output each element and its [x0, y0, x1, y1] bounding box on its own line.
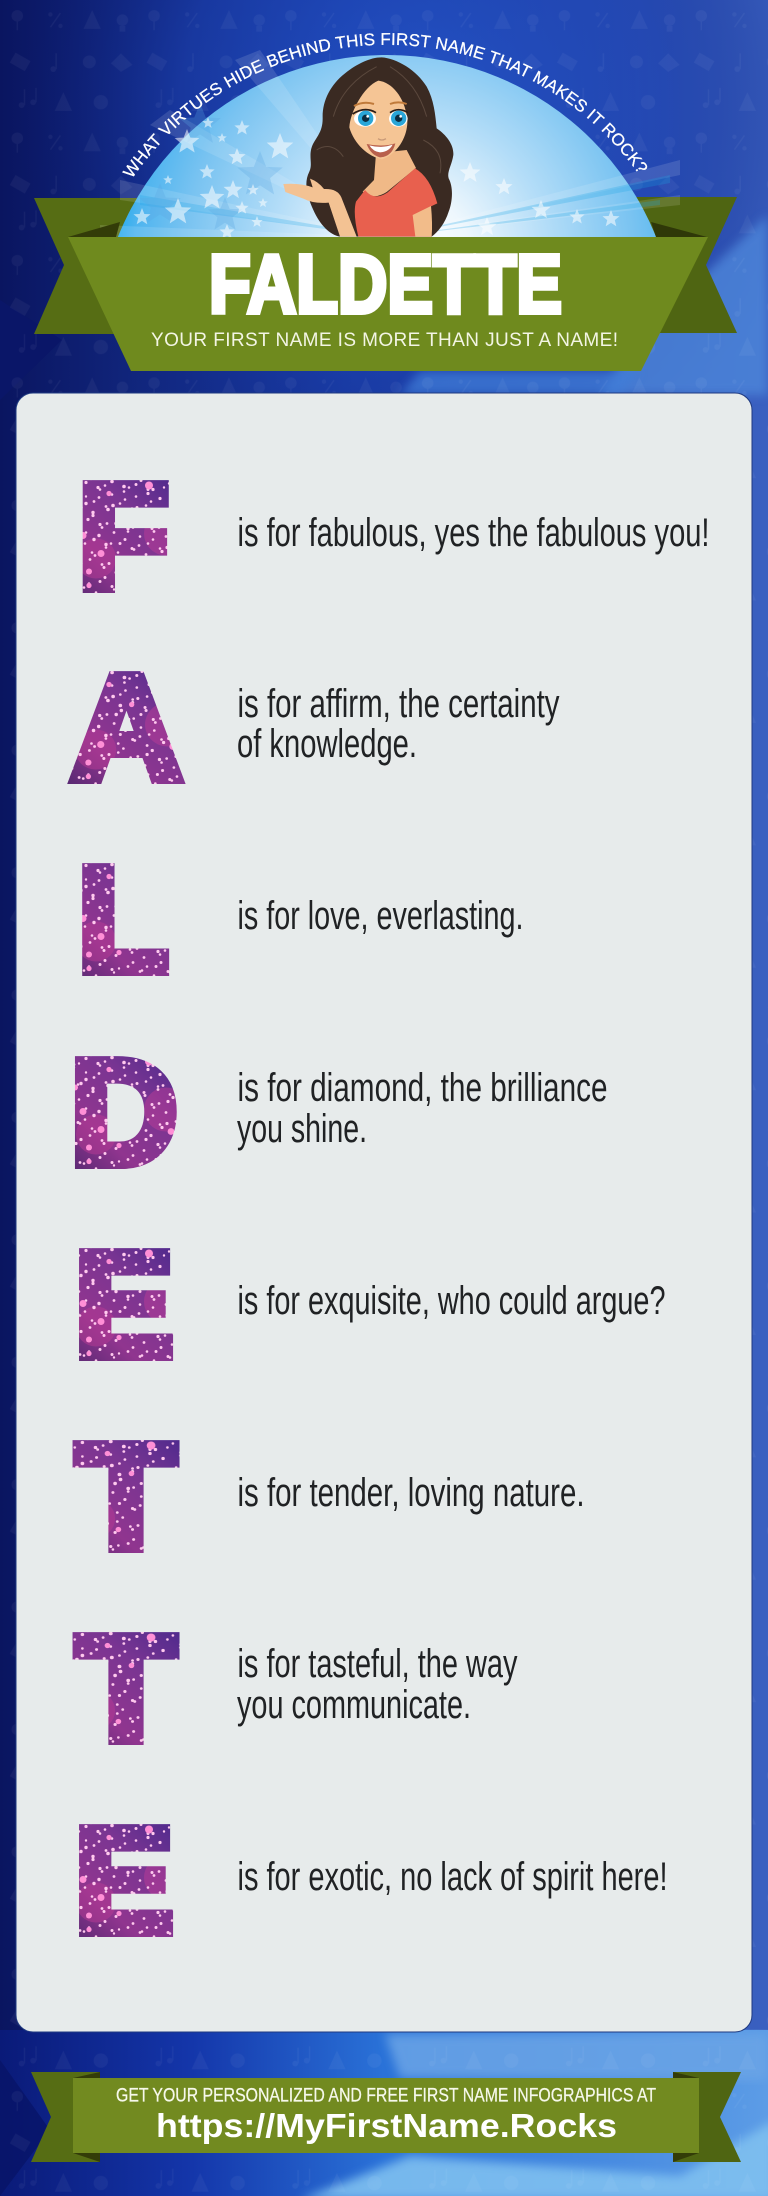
footer line one: GET YOUR PERSONALIZED AND FREE FIRST NAME INFOGRAPHICS AT	[116, 2086, 656, 2106]
text L: is for love, everlasting.	[238, 894, 524, 938]
neck and chest	[363, 150, 416, 196]
letter A: A	[71, 645, 182, 810]
footer main band	[73, 2078, 699, 2153]
text T second: is for tasteful, the way	[238, 1642, 518, 1686]
letter E: E	[75, 1222, 173, 1388]
top ribbon	[68, 222, 708, 371]
footer folds	[73, 2072, 699, 2162]
letter D: D	[71, 1030, 177, 1196]
eyes	[353, 102, 408, 127]
text A	[237, 682, 560, 766]
face	[349, 81, 407, 159]
footer ribbon	[31, 2072, 741, 2162]
ribbon tail left	[34, 198, 150, 334]
text A: of knowledge.	[237, 722, 417, 766]
mouth	[367, 139, 395, 157]
ribbon fold right	[651, 222, 707, 237]
stars	[133, 117, 620, 238]
hair	[306, 57, 453, 237]
header dome with sunburst	[100, 50, 680, 237]
letter L: L	[78, 838, 168, 1002]
name title: FALDETTE	[209, 238, 562, 330]
letter T: T	[77, 1414, 175, 1579]
footer url: https://MyFirstName.Rocks	[156, 2107, 617, 2144]
panel: letters	[16, 393, 752, 2032]
shirt	[355, 168, 437, 237]
text D	[237, 1066, 608, 1151]
text T: is for tender, loving nature.	[238, 1471, 584, 1515]
left arm and hand	[283, 179, 357, 237]
text A: is for affirm, the certainty	[238, 682, 560, 726]
footer tail right	[673, 2072, 741, 2162]
letter F: F	[78, 454, 169, 620]
curved heading: WHAT VIRTUES HIDE BEHIND THIS FIRST NAME THAT MAKES IT ROCK?	[122, 33, 648, 176]
text T second	[237, 1642, 518, 1727]
letter E second: E	[75, 1798, 173, 1964]
text T second: you communicate.	[237, 1683, 471, 1727]
ribbon tails behind dome	[34, 197, 737, 334]
footer tail left	[31, 2072, 100, 2162]
star shadows	[162, 104, 282, 230]
ribbon fold left	[68, 222, 120, 237]
right arm	[413, 206, 432, 237]
letter T second: T	[77, 1606, 175, 1771]
ribbon main band	[68, 237, 708, 371]
hair highlights	[317, 67, 441, 173]
illustration: woman	[283, 57, 453, 237]
ribbon tail right	[620, 197, 737, 333]
subtitle: YOUR FIRST NAME IS MORE THAN JUST A NAME!	[151, 330, 618, 351]
text D: you shine.	[237, 1107, 367, 1151]
text D: is for diamond, the brilliance	[238, 1066, 608, 1110]
